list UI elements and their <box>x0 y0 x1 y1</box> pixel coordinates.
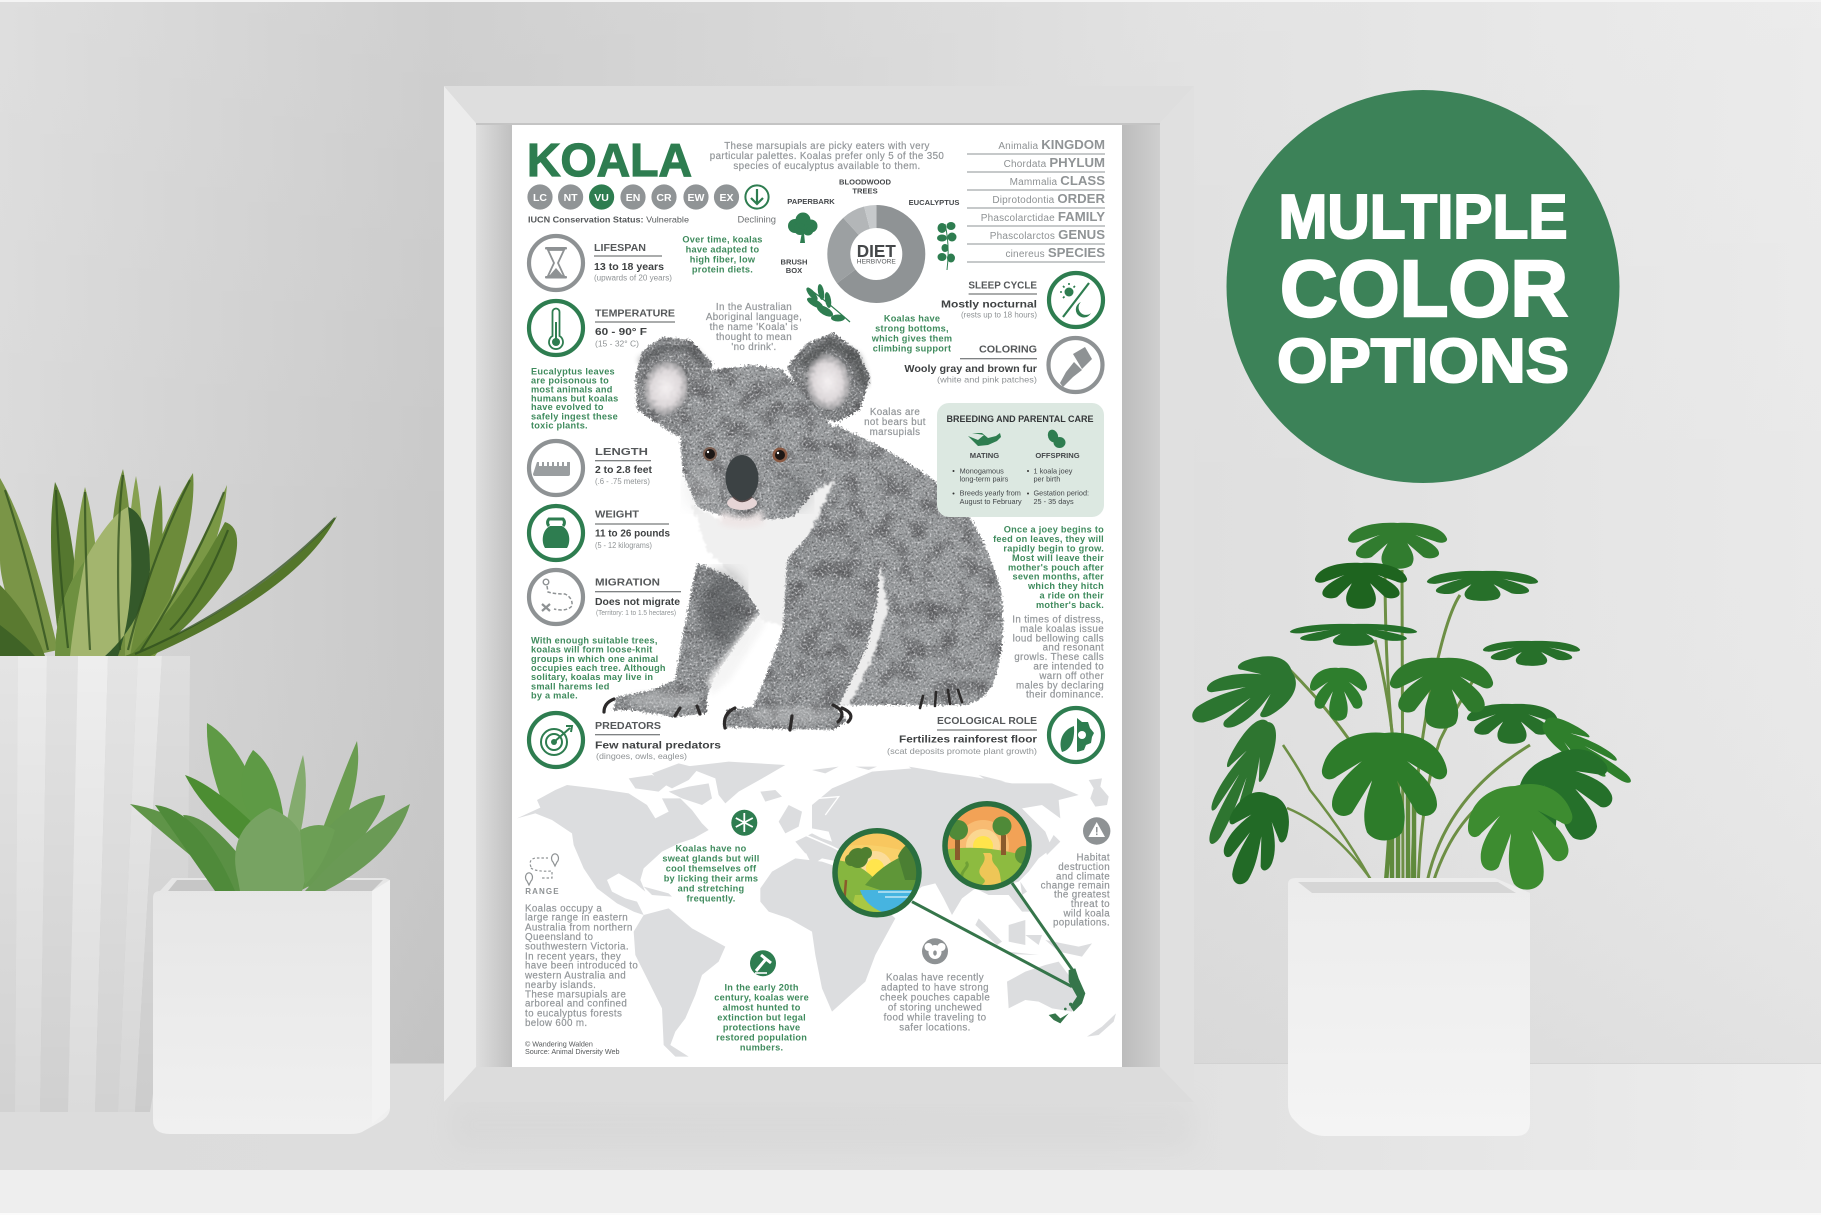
title: KOALA <box>527 134 692 186</box>
weight block <box>529 506 670 560</box>
diet donut chart <box>839 216 914 292</box>
conservation status badges: CR <box>656 192 672 204</box>
predators block: Few natural predators <box>595 739 721 751</box>
predators block: PREDATORS <box>595 720 661 732</box>
name origin note: the name 'Koala' is <box>710 322 798 333</box>
social groups note: occupies each tree. Although <box>531 663 666 673</box>
joey note: Once a joey begins to <box>1004 525 1104 535</box>
range description: southwestern Victoria. <box>525 941 629 952</box>
social groups note: koalas will form loose-knit <box>531 645 653 655</box>
footer credits: Source: Animal Diversity Web <box>525 1047 620 1056</box>
footer credits <box>525 1040 620 1056</box>
ecological role block: ECOLOGICAL ROLE <box>937 715 1037 727</box>
joey note: Most will leave their <box>1012 553 1104 563</box>
habitat threat note: destruction <box>1058 862 1110 873</box>
scene: lake and hills <box>832 828 922 918</box>
icon: koala face <box>922 938 948 964</box>
predators block <box>529 713 721 767</box>
weight block: (5 - 12 kilograms) <box>595 541 652 550</box>
range description <box>524 903 638 1029</box>
plant leaves <box>1180 523 1639 897</box>
icon: stork <box>968 433 1001 446</box>
range description: arboreal and confined <box>525 999 627 1010</box>
diet adaptation note <box>682 235 763 275</box>
hunting history note: In the early 20th <box>724 983 799 993</box>
climbing note <box>871 313 952 354</box>
right square pot <box>1288 878 1530 1136</box>
panel: breeding and parental care: 1 koala joey <box>1034 466 1073 475</box>
diet adaptation note: Over time, koalas <box>682 235 763 245</box>
climbing note: Koalas have <box>884 313 940 323</box>
distress call note: In times of distress, <box>1012 615 1104 626</box>
social groups note: by a male. <box>531 691 578 701</box>
left succulent <box>130 723 410 891</box>
right potted monstera plant <box>1180 523 1639 1136</box>
ecological role block: Fertilizes rainforest floor <box>899 734 1037 746</box>
diet adaptation note: high fiber, low <box>690 255 756 265</box>
koala face <box>703 447 788 528</box>
panel: breeding and parental care: Breeds yearly from <box>960 489 1021 498</box>
range description: These marsupials are <box>525 989 626 1000</box>
name origin note <box>706 302 802 353</box>
range description: Australia from northern <box>525 922 633 933</box>
range description: large range in eastern <box>525 913 628 924</box>
length block <box>529 441 652 495</box>
eucalyptus note: safely ingest these <box>531 411 618 421</box>
joey note: seven months, after <box>1012 572 1104 582</box>
lifespan block <box>529 236 672 290</box>
name origin note: 'no drink'. <box>731 342 777 353</box>
panel: breeding and parental care: long-term pairs <box>960 475 1009 484</box>
sweat gland note: sweat glands but will <box>662 854 760 864</box>
panel: breeding and parental care: August to February <box>960 497 1022 506</box>
sleep cycle block: Mostly nocturnal <box>941 299 1037 311</box>
marsupial note: marsupials <box>870 427 920 438</box>
lifespan block: (upwards of 20 years) <box>594 274 672 283</box>
cheek pouch note: adapted to have strong <box>881 983 989 994</box>
line to Australia from scene one <box>912 902 1072 987</box>
migration block: (Territory: 1 to 1.5 hectares) <box>596 610 676 617</box>
habitat threat note: Habitat <box>1076 853 1110 864</box>
icon: eucalyptus sprig <box>937 222 956 270</box>
left tall plant <box>0 469 337 656</box>
climbing note: which gives them <box>871 334 952 344</box>
social groups note: groups in which one animal <box>531 654 658 664</box>
panel: breeding and parental care: per birth <box>1034 475 1060 484</box>
left small square pot <box>153 878 390 1134</box>
joey note: mother's pouch after <box>1008 562 1104 572</box>
length block: 2 to 2.8 feet <box>595 464 652 476</box>
habitat threat note: populations. <box>1053 918 1110 929</box>
hunting history note <box>714 983 809 1053</box>
koala white limb stripe <box>832 560 888 708</box>
panel: breeding and parental care <box>937 403 1104 517</box>
coloring block: Wooly gray and brown fur <box>904 363 1037 375</box>
koala chest <box>692 480 835 625</box>
badge: multiple color options: OPTIONS <box>1277 327 1569 396</box>
diet adaptation note: protein diets. <box>692 265 753 275</box>
distress call note <box>1012 615 1104 701</box>
taxonomy table: Phascolarctos GENUS <box>990 227 1105 242</box>
sleep cycle block: (rests up to 18 hours) <box>961 311 1037 320</box>
distress call note: warn off other <box>1038 671 1104 682</box>
hunting history note: restored population <box>716 1033 807 1043</box>
range description: Queensland to <box>525 932 593 943</box>
length block: (.6 - .75 meters) <box>595 477 650 486</box>
sleep cycle block <box>941 273 1103 327</box>
hunting history note: century, koalas were <box>714 993 809 1003</box>
poster sheet <box>512 125 1122 1067</box>
range description: In recent years, they <box>525 951 621 962</box>
taxonomy table: Animalia KINGDOM <box>998 137 1105 152</box>
cheek pouch note: cheek pouches capable <box>880 993 990 1004</box>
climbing note: climbing support <box>873 344 951 354</box>
marsupial note: Koalas are <box>870 407 920 418</box>
badge: multiple color options: COLOR <box>1280 244 1568 333</box>
range description: nearby islands. <box>525 980 596 991</box>
eucalyptus note: toxic plants. <box>531 420 588 430</box>
diet labels: TREES <box>852 186 878 195</box>
icon: paperbark tree <box>788 212 818 243</box>
taxonomy table: cinereus SPECIES <box>1005 245 1105 260</box>
hunting history note: extinction but legal <box>717 1013 806 1023</box>
koala limbs and head <box>613 365 880 730</box>
koala photo illustration <box>604 333 1003 730</box>
length block: LENGTH <box>595 446 648 458</box>
habitat threat note: change remain <box>1041 881 1110 892</box>
footer credits: © Wandering Walden <box>525 1040 593 1049</box>
distress call note: are intended to <box>1033 662 1104 673</box>
taxonomy table: Chordata PHYLUM <box>1004 155 1105 170</box>
joey note: feed on leaves, they will <box>993 534 1104 544</box>
distress call note: growls. These calls <box>1014 652 1104 663</box>
social groups note: With enough suitable trees, <box>531 635 658 645</box>
icon: leaf branch <box>805 284 850 322</box>
distress call note: and resonant <box>1043 643 1104 654</box>
diet labels: BRUSH <box>780 257 808 266</box>
coloring block <box>904 338 1102 392</box>
conservation status badges: EX <box>719 192 734 204</box>
coloring block: (white and pink patches) <box>937 375 1037 385</box>
name origin note: In the Australian <box>716 302 792 313</box>
eucalyptus note: most animals and <box>531 384 613 394</box>
sweat gland note: and stretching <box>678 884 744 894</box>
conservation status badges: LC <box>533 192 547 204</box>
diet donut chart: HERBIVORE <box>857 259 896 266</box>
hunting history note: numbers. <box>740 1043 783 1053</box>
cheek pouch note: food while traveling to <box>884 1013 987 1024</box>
temperature block: (15 - 32° C) <box>595 340 639 349</box>
sweat gland note: frequently. <box>686 894 736 904</box>
sleep cycle block: SLEEP CYCLE <box>968 279 1037 291</box>
sweat gland note: Koalas have no <box>676 844 747 854</box>
icon: range route <box>526 854 558 885</box>
panel: breeding and parental care: 25 - 35 days <box>1034 497 1074 506</box>
eucalyptus note: humans but koalas <box>531 393 618 403</box>
plant stems <box>1283 565 1530 893</box>
cheek pouch note: of storing unchewed <box>888 1003 982 1014</box>
conservation status badges: NT <box>564 192 578 204</box>
sweat gland note <box>662 844 760 904</box>
scene: sunset path and trees <box>943 802 1033 892</box>
coloring block: COLORING <box>979 344 1037 356</box>
weight block: 11 to 26 pounds <box>595 528 670 540</box>
name origin note: Aboriginal language, <box>706 312 802 323</box>
temperature block: 60 - 90° F <box>595 326 648 338</box>
migration block <box>529 570 681 624</box>
taxonomy table: Phascolarctidae FAMILY <box>981 209 1105 224</box>
name origin note: thought to mean <box>716 332 792 343</box>
ecological role block <box>887 708 1103 762</box>
panel: breeding and parental care: MATING <box>970 451 999 460</box>
diet labels <box>780 178 959 275</box>
panel: breeding and parental care: BREEDING AND PARENTAL CARE <box>946 414 1094 424</box>
picture frame <box>444 86 1194 1102</box>
left ribbed vase <box>0 656 190 1112</box>
range heading: RANGE <box>525 887 560 896</box>
taxonomy table <box>967 137 1105 262</box>
badge: multiple color options: MULTIPLE <box>1278 183 1568 252</box>
cheek pouch note: safer locations. <box>899 1023 971 1034</box>
icon: eggs <box>1046 428 1066 448</box>
panel: breeding and parental care: Gestation period: <box>1034 489 1089 498</box>
icon: gavel <box>750 950 776 976</box>
weight block: WEIGHT <box>595 509 640 521</box>
koala range on Australia <box>1049 968 1085 1023</box>
social groups note: solitary, koalas may live in <box>531 672 653 682</box>
diet labels: PAPERBARK <box>787 197 835 206</box>
badge: multiple color options <box>1226 90 1620 483</box>
taxonomy table: Mammalia CLASS <box>1010 173 1105 188</box>
lifespan block: 13 to 18 years <box>594 261 664 273</box>
cheek pouch note <box>880 973 990 1034</box>
temperature block <box>529 301 675 355</box>
koala body <box>770 425 1003 705</box>
temperature block: TEMPERATURE <box>595 308 675 320</box>
social groups note <box>531 635 666 701</box>
joey note: a ride on their <box>1039 590 1104 600</box>
intro text: particular palettes. Koalas prefer only 5 of the 350 <box>710 151 944 162</box>
conservation status badges: VU <box>594 192 609 204</box>
predators block: (dingoes, owls, eagles) <box>596 751 687 761</box>
joey note: rapidly begin to grow. <box>1003 543 1104 553</box>
conservation status badges: EW <box>688 192 705 204</box>
sweat gland note: by licking their arms <box>664 874 758 884</box>
habitat threat note: threat to <box>1071 899 1110 910</box>
range description: below 600 m. <box>525 1018 587 1029</box>
diet labels: BOX <box>786 266 802 275</box>
intro text: These marsupials are picky eaters with very <box>724 141 930 152</box>
hunting history note: almost hunted to <box>723 1003 801 1013</box>
marsupial note <box>864 407 926 438</box>
range description: have been introduced to <box>525 961 638 972</box>
conservation caption: IUCN Conservation Status: Vulnerable <box>528 216 689 224</box>
conservation status badges: EN <box>626 192 640 204</box>
lifespan block: LIFESPAN <box>594 242 646 254</box>
range description: western Australia and <box>524 970 626 981</box>
joey note: mother's back. <box>1036 600 1104 610</box>
diet donut chart: DIET <box>857 241 896 261</box>
habitat threat note: and climate <box>1056 871 1110 882</box>
joey note <box>993 525 1104 610</box>
line to Australia from scene two <box>1012 883 1074 972</box>
eucalyptus note: Eucalyptus leaves <box>531 367 615 377</box>
ecological role block: (scat deposits promote plant growth) <box>887 746 1037 756</box>
distress call note: male koalas issue <box>1020 624 1104 635</box>
cheek pouch note: Koalas have recently <box>886 973 984 984</box>
diet labels: BLOODWOOD <box>839 178 891 187</box>
icon: snowflake <box>731 810 757 836</box>
shelf <box>0 1063 1821 1215</box>
migration block: Does not migrate <box>595 596 680 608</box>
sweat gland note: cool themselves off <box>666 864 757 874</box>
panel: breeding and parental care: Monogamous <box>960 466 1004 475</box>
hunting history note: protections have <box>723 1023 800 1033</box>
koala claws <box>604 690 962 730</box>
conservation status badges <box>527 184 769 210</box>
joey note: which they hitch <box>1027 581 1104 591</box>
marsupial note: not bears but <box>864 417 926 428</box>
diet adaptation note: have adapted to <box>686 245 759 255</box>
distress call note: males by declaring <box>1016 680 1104 691</box>
intro text: species of eucalyptus available to them. <box>733 161 921 172</box>
eucalyptus note <box>531 367 618 430</box>
climbing note: strong bottoms, <box>875 323 949 333</box>
habitat threat note: wild koala <box>1062 908 1110 919</box>
world map <box>517 762 1116 1057</box>
eucalyptus note: are poisonous to <box>531 376 609 386</box>
intro text <box>710 141 944 172</box>
taxonomy table: Diprotodontia ORDER <box>992 191 1105 206</box>
distress call note: their dominance. <box>1026 690 1104 701</box>
habitat threat note: the greatest <box>1054 890 1110 901</box>
koala ears <box>635 333 870 437</box>
range description: Koalas occupy a <box>525 903 602 914</box>
trend caption: Declining <box>737 214 776 224</box>
fur shading <box>630 470 830 724</box>
migration block: MIGRATION <box>595 577 660 589</box>
range description: to eucalyptus forests <box>525 1008 622 1019</box>
panel: breeding and parental care: OFFSPRING <box>1035 451 1080 460</box>
icon: warning <box>1083 817 1110 845</box>
diet labels: EUCALYPTUS <box>909 198 959 207</box>
eucalyptus note: have evolved to <box>531 402 604 412</box>
social groups note: small harems led <box>531 681 610 691</box>
habitat threat note <box>1041 853 1110 929</box>
distress call note: loud bellowing calls <box>1013 633 1104 644</box>
